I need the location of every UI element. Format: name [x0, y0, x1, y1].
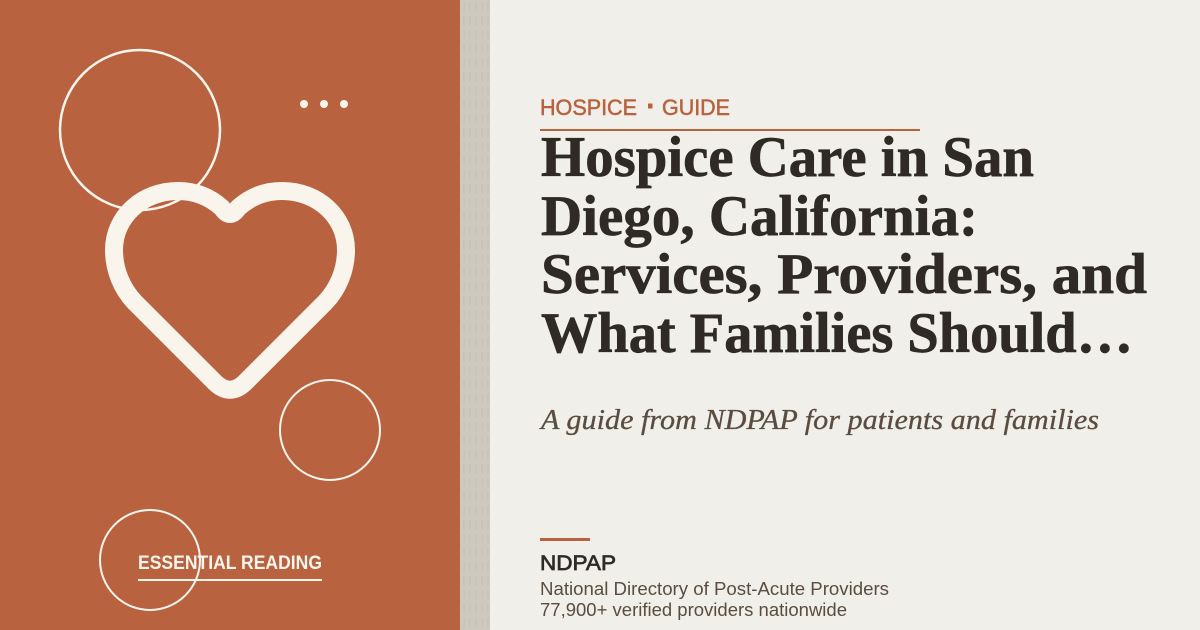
three dots	[300, 100, 348, 108]
bottom outline circle	[100, 510, 200, 610]
footer: publisher	[540, 538, 889, 620]
panel: left terracotta	[0, 0, 460, 630]
icon: heart	[114, 191, 346, 390]
title: Services, Providers, and	[541, 243, 1147, 306]
small outline circle right	[280, 380, 380, 480]
publisher name: NDPAP	[540, 552, 616, 575]
publisher description: National Directory of Post-Acute Providers	[540, 579, 889, 599]
subtitle: A guide from NDPAP for patients and families	[539, 405, 1099, 436]
title: What Families Should…	[541, 302, 1133, 365]
category heading: GUIDE	[662, 95, 730, 120]
large outline circle	[60, 50, 220, 210]
title	[541, 126, 1147, 365]
title: Hospice Care in San	[541, 126, 1034, 189]
category heading: HOSPICE	[540, 95, 637, 120]
category heading	[540, 95, 920, 131]
decorative strip	[460, 0, 490, 630]
panel: right background	[490, 0, 1200, 630]
title: Diego, California:	[541, 185, 978, 248]
essential reading label: ESSENTIAL READING	[138, 553, 322, 574]
provider count: 77,900+ verified providers nationwide	[540, 600, 847, 620]
